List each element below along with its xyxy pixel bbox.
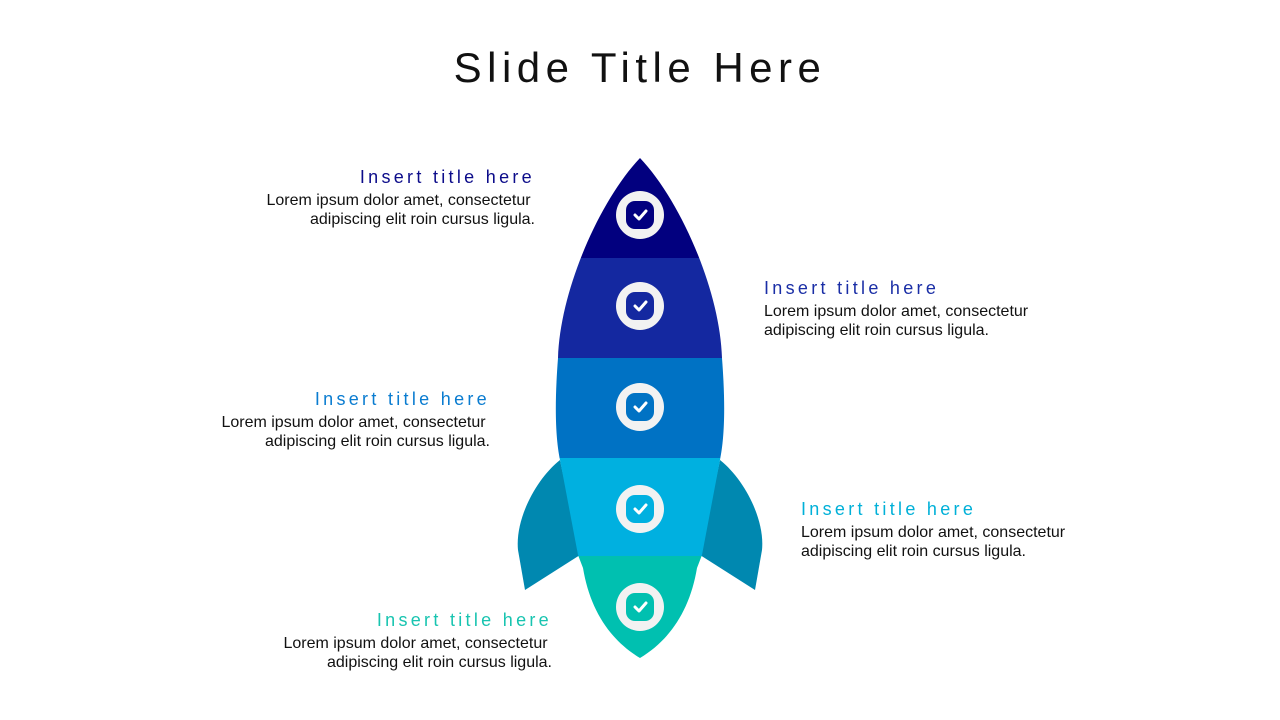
text block 4: Lorem ipsum dolor amet, consectetur <box>801 524 1065 541</box>
text block 1: Insert title here <box>360 167 535 187</box>
text block 2 <box>764 278 1028 339</box>
text block 1 <box>266 167 535 228</box>
text block 5: adipiscing elit roin cursus ligula. <box>327 654 552 671</box>
text block 4: Insert title here <box>801 499 976 519</box>
text block 3: adipiscing elit roin cursus ligula. <box>265 433 490 450</box>
text block 2: adipiscing elit roin cursus ligula. <box>764 322 989 339</box>
text block 3 <box>221 389 490 450</box>
text block 5: Lorem ipsum dolor amet, consectetur <box>283 635 548 652</box>
text block 2: Insert title here <box>764 278 939 298</box>
title: Slide Title Here <box>454 44 826 91</box>
text block 1: Lorem ipsum dolor amet, consectetur <box>266 192 531 209</box>
fin left <box>518 460 580 590</box>
text block 4 <box>801 499 1065 560</box>
text block 3: Insert title here <box>315 389 490 409</box>
fin right <box>700 460 762 590</box>
text block 5: Insert title here <box>377 610 552 630</box>
text block 3: Lorem ipsum dolor amet, consectetur <box>221 414 486 431</box>
text block 4: adipiscing elit roin cursus ligula. <box>801 543 1026 560</box>
rocket <box>518 158 762 658</box>
text block 1: adipiscing elit roin cursus ligula. <box>310 211 535 228</box>
text block 2: Lorem ipsum dolor amet, consectetur <box>764 303 1028 320</box>
body bands <box>556 158 724 658</box>
text block 5 <box>283 610 552 671</box>
icons <box>616 191 664 631</box>
